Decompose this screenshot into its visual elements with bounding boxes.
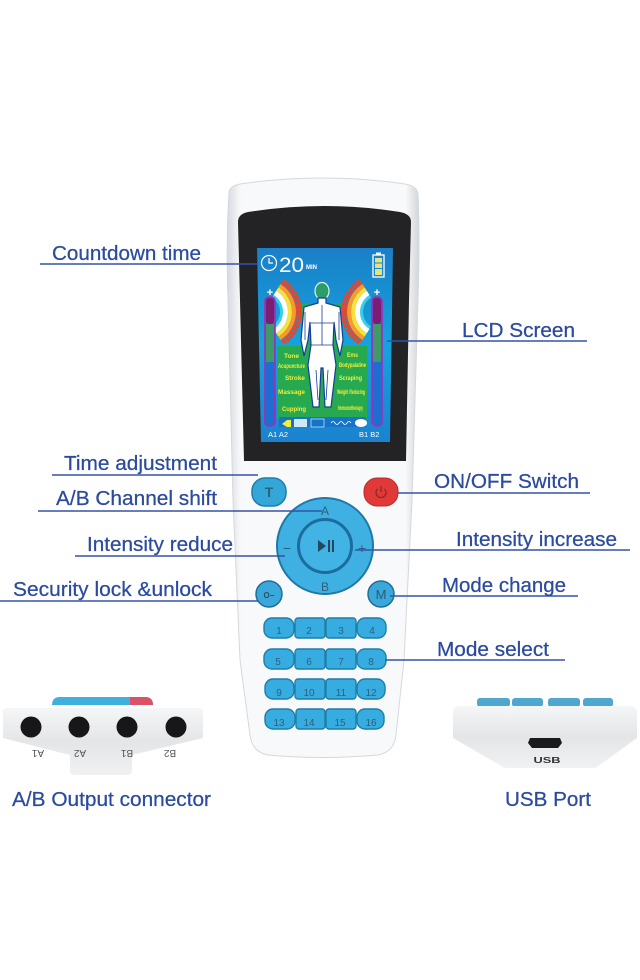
dial labels: B [321,580,329,594]
label: Time adjustment: Time adjustment [64,453,217,475]
left mode labels: Stroke [285,376,306,382]
label: Intensity increase: Intensity increase [456,529,617,551]
right mode labels: Scraping [339,376,362,382]
left mode labels: Massage [278,390,306,396]
bottom status strip [279,417,367,427]
key row 2: 7 [338,657,344,668]
lock button: O− [264,591,275,600]
key row 1 [264,618,386,638]
key row 1: 4 [369,626,375,637]
top keys strip [52,697,153,705]
left fan gauge [273,282,299,342]
left intensity bar [265,287,275,426]
USB port view [453,698,637,768]
top keys [477,698,613,707]
key row 3: 9 [276,688,282,699]
leader lines [0,264,630,660]
key row 3: 10 [303,688,315,699]
timer icon [262,256,276,270]
green panel [277,303,367,420]
direction dial [277,498,373,594]
key row 1: 2 [306,626,312,637]
left mode labels: Acupuncture [278,364,305,370]
key row 2: 5 [275,657,281,668]
label: LCD Screen: LCD Screen [462,320,575,342]
LCD screen [257,248,393,442]
jack labels: A2 [73,747,86,758]
label: ON/OFF Switch: ON/OFF Switch [434,471,579,493]
key row 4: 14 [303,718,315,729]
right intensity bar [372,287,382,426]
right mode labels: Weight Reducing [337,390,365,396]
human body figure [301,282,343,407]
left mode labels [278,354,306,413]
micro USB socket [528,738,562,748]
label: USB Port: USB Port [505,789,591,811]
countdown value: 20 [279,254,304,277]
right mode labels: Bodypalatine [339,363,366,369]
USB text: USB [534,756,561,765]
right mode labels: Immunotherapy [338,406,363,412]
jack labels: B2 [163,747,176,758]
remote body [227,178,419,758]
key row 3: 12 [365,688,377,699]
minute unit: MIN [306,265,317,271]
jacks [20,716,186,738]
M button [368,581,394,607]
label: Mode select: Mode select [437,639,549,661]
power button [364,478,398,506]
label: Security lock &unlock: Security lock &unlock [13,579,213,601]
dial labels: − [283,540,291,556]
label: Mode change: Mode change [442,575,566,597]
dial labels: + [358,540,366,556]
key row 3: 11 [336,688,347,699]
right mode labels: Ems [347,353,359,359]
key row 1: 1 [276,626,282,637]
key row 2 [264,649,386,669]
play pause icon [318,540,334,552]
battery icon [373,252,384,277]
label: A/B Output connector: A/B Output connector [12,789,211,811]
number keypad [264,618,386,729]
channel labels: B1 B2 [359,430,379,439]
left mode labels: Tone [284,354,300,360]
channel labels [268,430,379,439]
label: Intensity reduce: Intensity reduce [87,534,233,556]
red key edge [130,697,153,705]
channel labels: A1 A2 [268,430,288,439]
remote control [227,178,419,758]
label: Countdown time: Countdown time [52,243,201,265]
left mode labels: Cupping [282,407,306,413]
jack labels: B1 [120,747,133,758]
lock button [256,581,282,607]
key row 4: 15 [334,718,346,729]
dial labels [283,504,366,594]
key row 3 [265,679,385,699]
screen bezel [238,206,411,461]
key row 4: 13 [273,718,285,729]
key row 2: 6 [306,657,312,668]
M button: M [376,587,386,602]
right mode labels [337,353,366,412]
right fan gauge [344,282,370,342]
T button: T [265,484,274,500]
LCD background [257,248,393,442]
connector body [3,708,203,775]
dial labels: A [321,504,329,518]
key row 4: 16 [365,718,377,729]
jack labels [31,747,176,758]
right intensity bar: + [374,287,380,299]
key row 1: 3 [338,626,344,637]
label: A/B Channel shift: A/B Channel shift [56,488,217,510]
left intensity bar: + [267,287,273,299]
output connector view [3,697,203,775]
T button [252,478,286,506]
jack labels: A1 [31,747,44,758]
key row 2: 8 [368,657,374,668]
key row 4 [265,709,384,729]
USB body [453,706,637,768]
